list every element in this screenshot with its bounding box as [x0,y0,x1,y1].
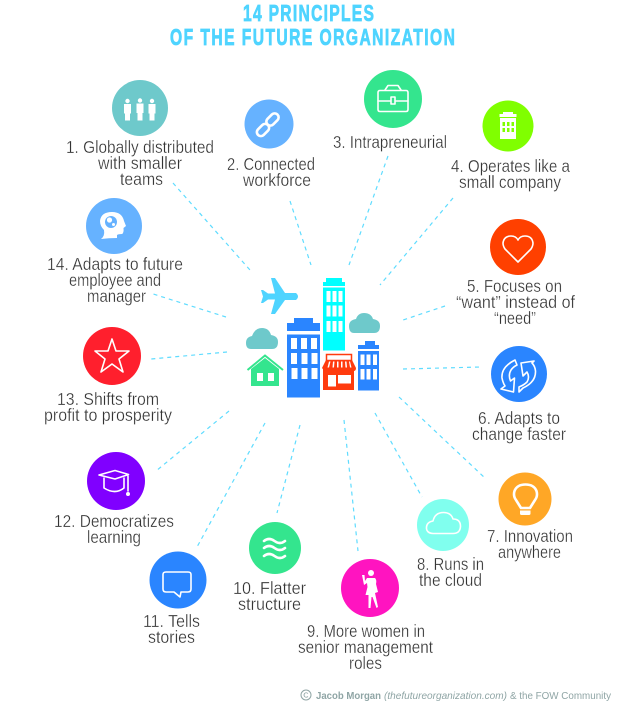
label: with smaller [97,153,182,173]
label [44,389,172,425]
label [451,156,570,192]
central city illustration [246,278,380,398]
large blue building [287,318,320,398]
label: learning [87,527,141,547]
label [487,526,573,562]
label: “want” instead of [456,292,575,312]
footer credit: Jacob Morgan [316,690,381,702]
title: 14 PRINCIPLES [243,1,374,27]
label: 4. Operates like a [451,156,570,176]
label: 10. Flatter [233,578,306,598]
icon: airplane [261,278,298,314]
footer credit: & the FOW Community [510,690,612,702]
principle 6 [472,346,566,444]
label: profit to prosperity [44,405,172,425]
label: the cloud [419,570,482,590]
principle 10 [233,522,306,614]
label [54,511,174,547]
label: stories [148,627,195,647]
icon: waves [249,522,301,574]
principle 14 [47,198,183,306]
label [298,621,433,673]
house [248,356,283,386]
icon: cloud [417,499,469,551]
icon: woman silhouette [341,559,399,617]
label [66,137,214,189]
label: 7. Innovation [487,526,573,546]
label [417,554,484,590]
label: senior management [298,637,433,657]
principle 5 [456,219,575,328]
icon: briefcase [364,70,422,128]
label [472,408,566,444]
label: employee and [69,270,161,290]
icon: head with thought [86,198,142,254]
icon: refresh arrows [491,346,547,402]
cloud left [246,328,278,349]
icon: heart [490,219,546,275]
label: anywhere [498,542,561,562]
label: 13. Shifts from [57,389,159,409]
cloud right [349,313,380,333]
principle 9 [298,559,433,673]
footer credit: (thefutureorganization.com) [384,690,507,702]
label: 3. Intrapreneurial [333,132,447,152]
small blue building [358,341,379,390]
principle 1 [66,80,214,189]
title [170,1,455,51]
icon: star [83,327,141,385]
icon: office building [482,100,534,152]
label: 14. Adapts to future [47,254,183,274]
principle 3 [333,70,447,152]
icon: chain link [244,100,294,148]
label: 1. Globally distributed [66,137,214,157]
label: workforce [242,170,311,190]
icon: speech bubble [150,552,206,608]
principle 13 [44,327,172,425]
label: structure [238,594,301,614]
label: 9. More women in [307,621,425,641]
label: “need” [494,308,536,328]
label: 8. Runs in [417,554,484,574]
label: 12. Democratizes [54,511,174,531]
title: OF THE FUTURE ORGANIZATION [170,25,455,51]
principle 2 [227,100,315,190]
icon: people [112,80,168,136]
principle 12 [54,452,174,547]
label: 11. Tells [143,611,200,631]
label: roles [349,653,382,673]
shop [322,354,356,390]
icon: light bulb [498,472,552,526]
principle 8 [417,499,484,590]
principle 4 [451,100,570,192]
principle 7 [487,472,573,562]
footer credit [301,690,612,702]
label: 5. Focuses on [467,276,562,296]
cyan tower [323,278,345,350]
label: 2. Connected [227,154,315,174]
label [143,611,200,647]
principle 11 [143,552,206,647]
dashed connector lines [150,156,486,551]
label [456,276,575,328]
label [233,578,306,614]
label: 6. Adapts to [478,408,560,428]
label: teams [120,169,163,189]
label: manager [87,286,146,306]
icon: graduation cap [87,452,145,510]
label: change faster [472,424,566,444]
label [227,154,315,190]
label [47,254,183,306]
label: small company [459,172,561,192]
